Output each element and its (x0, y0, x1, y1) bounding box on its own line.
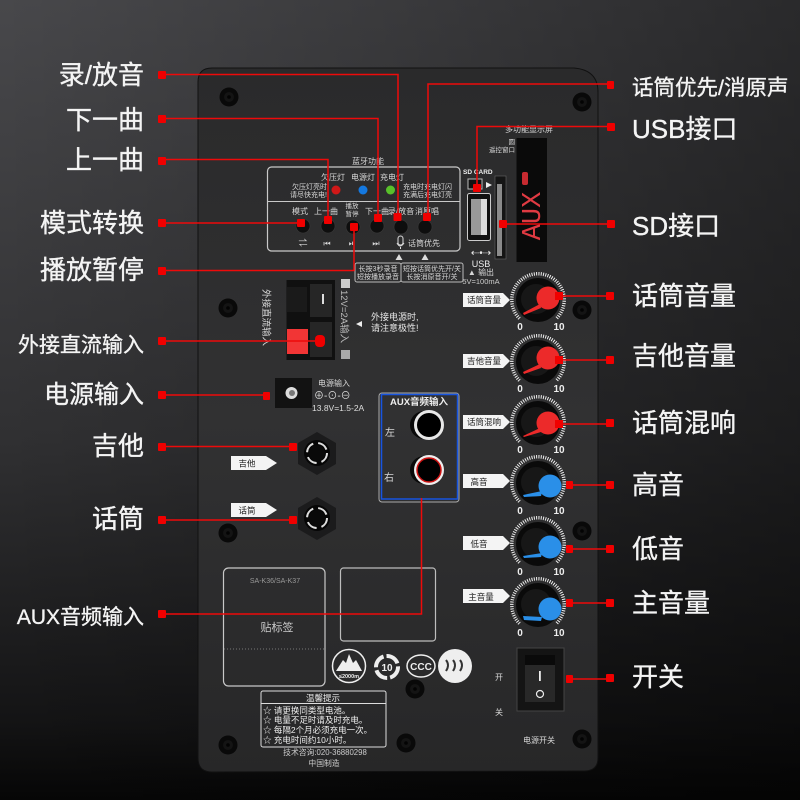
warm tips box: ☆ 电量不足时请及时充电。 (263, 715, 367, 725)
callout: next track: 下一曲 (66, 105, 144, 135)
callout: microphone: 话筒 (92, 504, 144, 534)
bluetooth function box: 充电灯 (380, 172, 404, 182)
callout: treble: 高音 (632, 470, 684, 500)
callout: previous track: 上一曲 (66, 145, 144, 175)
warm tips box: 技术咨询:020-36880298 (283, 747, 367, 757)
button notes: 长按消原音开/关 (407, 272, 457, 281)
bluetooth function box: 充电时充电灯闪 (403, 182, 452, 191)
power input jack: ⊕-⊙-⊖ (314, 391, 351, 402)
callout: mic priority (423, 76, 788, 221)
AUX audio input box (379, 393, 459, 502)
SD card and USB area: ▲ 输出 (468, 267, 494, 277)
callout: mic reverb (555, 408, 736, 438)
callout: mic reverb: 话筒混响 (632, 408, 736, 438)
knob: master volume (463, 579, 565, 639)
guitar jack (231, 432, 336, 475)
warm tips box: ☆ 请更换同类型电池。 (263, 706, 350, 716)
callout: power switch: 开关 (632, 662, 684, 692)
bluetooth function box: ⏭ (372, 239, 380, 248)
callout: power switch (566, 662, 684, 692)
bluetooth function box: 充满后充电灯亮 (403, 190, 452, 199)
button notes: 短按话筒优先开/关 (403, 264, 461, 273)
external DC connector (260, 279, 419, 360)
callout: bass: 低音 (632, 534, 684, 564)
power switch: 开 (495, 673, 503, 682)
warm tips box: 中国制造 (308, 758, 340, 768)
microphone icon (397, 236, 404, 249)
callout: AUX input: AUX音频输入 (17, 606, 144, 629)
external DC connector: 12V=2A输入 (338, 290, 350, 344)
knob: treble: 10 (553, 506, 565, 517)
external DC connector: 外接直流输入 (260, 289, 272, 347)
knob: mic reverb: 10 (553, 445, 565, 456)
knob: bass: 低音 (470, 539, 488, 549)
callout: power input (44, 381, 270, 409)
callout: guitar volume: 吉他音量 (632, 341, 736, 371)
multi-function display (489, 124, 553, 262)
knob: master volume: 0 (517, 628, 523, 639)
callout: record/playback (59, 60, 402, 221)
warm tips box: ☆ 每隔2个月必须充电一次。 (263, 725, 372, 735)
callout: guitar (92, 431, 297, 461)
callout: USB port (473, 114, 737, 192)
warm tips box: 温馨提示 (306, 693, 340, 703)
microphone jack (231, 497, 336, 540)
multi-function display: 多功能显示屏 (505, 124, 553, 134)
guitar jack: 吉他 (238, 458, 256, 468)
callout: mic volume: 话筒音量 (632, 281, 736, 311)
callout: master volume (566, 588, 710, 618)
AUX audio input box: 左 (385, 426, 395, 439)
bluetooth function box: ⏮ (323, 239, 331, 248)
certification icons: 10 (381, 663, 393, 674)
knob: mic reverb (463, 397, 565, 456)
buttons (296, 219, 432, 234)
knob: mic reverb: 话筒混响 (467, 417, 501, 427)
callout: USB port: USB接口 (632, 114, 737, 144)
power switch: 关 (495, 707, 503, 717)
multi-function display: 遥控窗口 (489, 145, 515, 154)
button notes: 短按播放录音 (357, 272, 399, 281)
bluetooth function box: 电源灯 (351, 172, 375, 182)
warm tips box: ☆ 充电时间约10小时。 (263, 735, 351, 745)
callout: previous track (66, 145, 332, 224)
knob: guitar volume: 吉他音量 (467, 356, 501, 366)
power input jack (275, 378, 365, 413)
knob: treble: 高音 (470, 477, 488, 487)
callout: guitar volume (555, 341, 736, 371)
callout: SD slot (499, 211, 720, 241)
knob: mic volume (463, 274, 565, 333)
knob: bass: 0 (517, 567, 523, 578)
knob: guitar volume (463, 336, 565, 395)
knob: mic volume: 10 (553, 322, 565, 333)
callout: guitar: 吉他 (92, 431, 144, 461)
knob: master volume: 10 (553, 628, 565, 639)
bluetooth function box: 暂停 (346, 209, 359, 218)
bluetooth function box: 录/放音 (388, 206, 414, 216)
external DC connector: 请注意极性! (371, 322, 419, 333)
callout: next track (66, 105, 382, 222)
callout: play pause (40, 223, 358, 285)
bluetooth function box: 播放 (346, 201, 359, 210)
callout: mic volume (555, 281, 736, 311)
bluetooth function box: ⇌ (298, 238, 308, 248)
knob: treble (463, 457, 565, 517)
bluetooth function box: 欠压灯 (321, 172, 345, 182)
external DC connector: 外接电源时, (371, 311, 419, 322)
USB port (468, 194, 490, 240)
bluetooth function box (268, 156, 460, 251)
bluetooth function box: 话筒优先 (408, 238, 440, 248)
certification icons (332, 649, 472, 683)
callout: external DC input (18, 334, 325, 357)
panel screws (218, 88, 592, 754)
microphone jack: 话筒 (238, 506, 256, 516)
callout: AUX input (17, 498, 422, 629)
certification icons: ≤2000m (339, 674, 359, 680)
callout: mic priority: 话筒优先/消原声 (632, 76, 788, 100)
SD card and USB area (462, 169, 506, 286)
power switch (495, 648, 564, 745)
power input jack: 电源输入 (318, 378, 350, 388)
certification icons: CCC (410, 662, 432, 673)
status leds (332, 186, 395, 194)
bluetooth function box: 蓝牙功能 (352, 156, 384, 166)
button notes: 长按3秒录音 (359, 264, 397, 273)
multi-function display: AUX (519, 192, 549, 240)
knob: guitar volume: 0 (517, 384, 523, 395)
bluetooth function box: 下一曲 (365, 206, 389, 216)
callout: external DC input: 外接直流输入 (18, 334, 144, 357)
multi-function display: 圆 (508, 138, 515, 146)
knob: mic volume: 0 (517, 322, 523, 333)
callout: treble (566, 470, 684, 500)
callout: microphone (92, 504, 297, 534)
callout: mode switch: 模式转换 (40, 208, 144, 238)
bluetooth function box: 欠压灯亮时 (292, 182, 327, 191)
callout: play pause: 播放暂停 (40, 255, 144, 285)
callout: power input: 电源输入 (44, 381, 144, 409)
AUX audio input box: 右 (384, 471, 394, 484)
callout: SD slot: SD接口 (632, 211, 720, 241)
bluetooth function box: 模式 (292, 206, 308, 216)
sticker label area: 贴标签 (260, 620, 294, 634)
knob: master volume: 主音量 (468, 592, 494, 602)
blank label area (340, 568, 436, 641)
SD slot (495, 176, 506, 259)
bluetooth function box: 消原唱 (415, 206, 439, 216)
control panel (198, 68, 598, 772)
bluetooth function box: 请尽快充电! (290, 190, 327, 199)
SD card and USB area: 5V=100mA (462, 277, 500, 286)
SD card and USB area: SD CARD (463, 169, 493, 176)
power switch: 电源开关 (523, 735, 555, 745)
callout: mode switch (40, 208, 305, 238)
callout: bass (566, 534, 684, 564)
warm tips box (261, 691, 386, 768)
sticker label area (224, 568, 325, 686)
bluetooth function box: 上一曲 (314, 206, 338, 216)
callout: record/playback: 录/放音 (59, 60, 144, 90)
sticker label area: SA-K36/SA-K37 (250, 578, 300, 585)
knob: treble: 0 (517, 506, 523, 517)
callout: master volume: 主音量 (632, 588, 710, 618)
knob: mic volume: 话筒音量 (467, 295, 501, 305)
button notes (355, 254, 463, 282)
knob: guitar volume: 10 (553, 384, 565, 395)
bluetooth function box: ⏯ (349, 239, 355, 248)
AUX audio input box: AUX音频输入 (390, 396, 449, 408)
SD card and USB area: USB (472, 259, 490, 269)
power input jack: 13.8V=1.5-2A (312, 403, 365, 413)
knob: mic reverb: 0 (517, 445, 523, 456)
SD card and USB area: ⇠•⇢ (471, 248, 491, 259)
knob: bass: 10 (553, 567, 565, 578)
knob: bass (463, 518, 565, 578)
